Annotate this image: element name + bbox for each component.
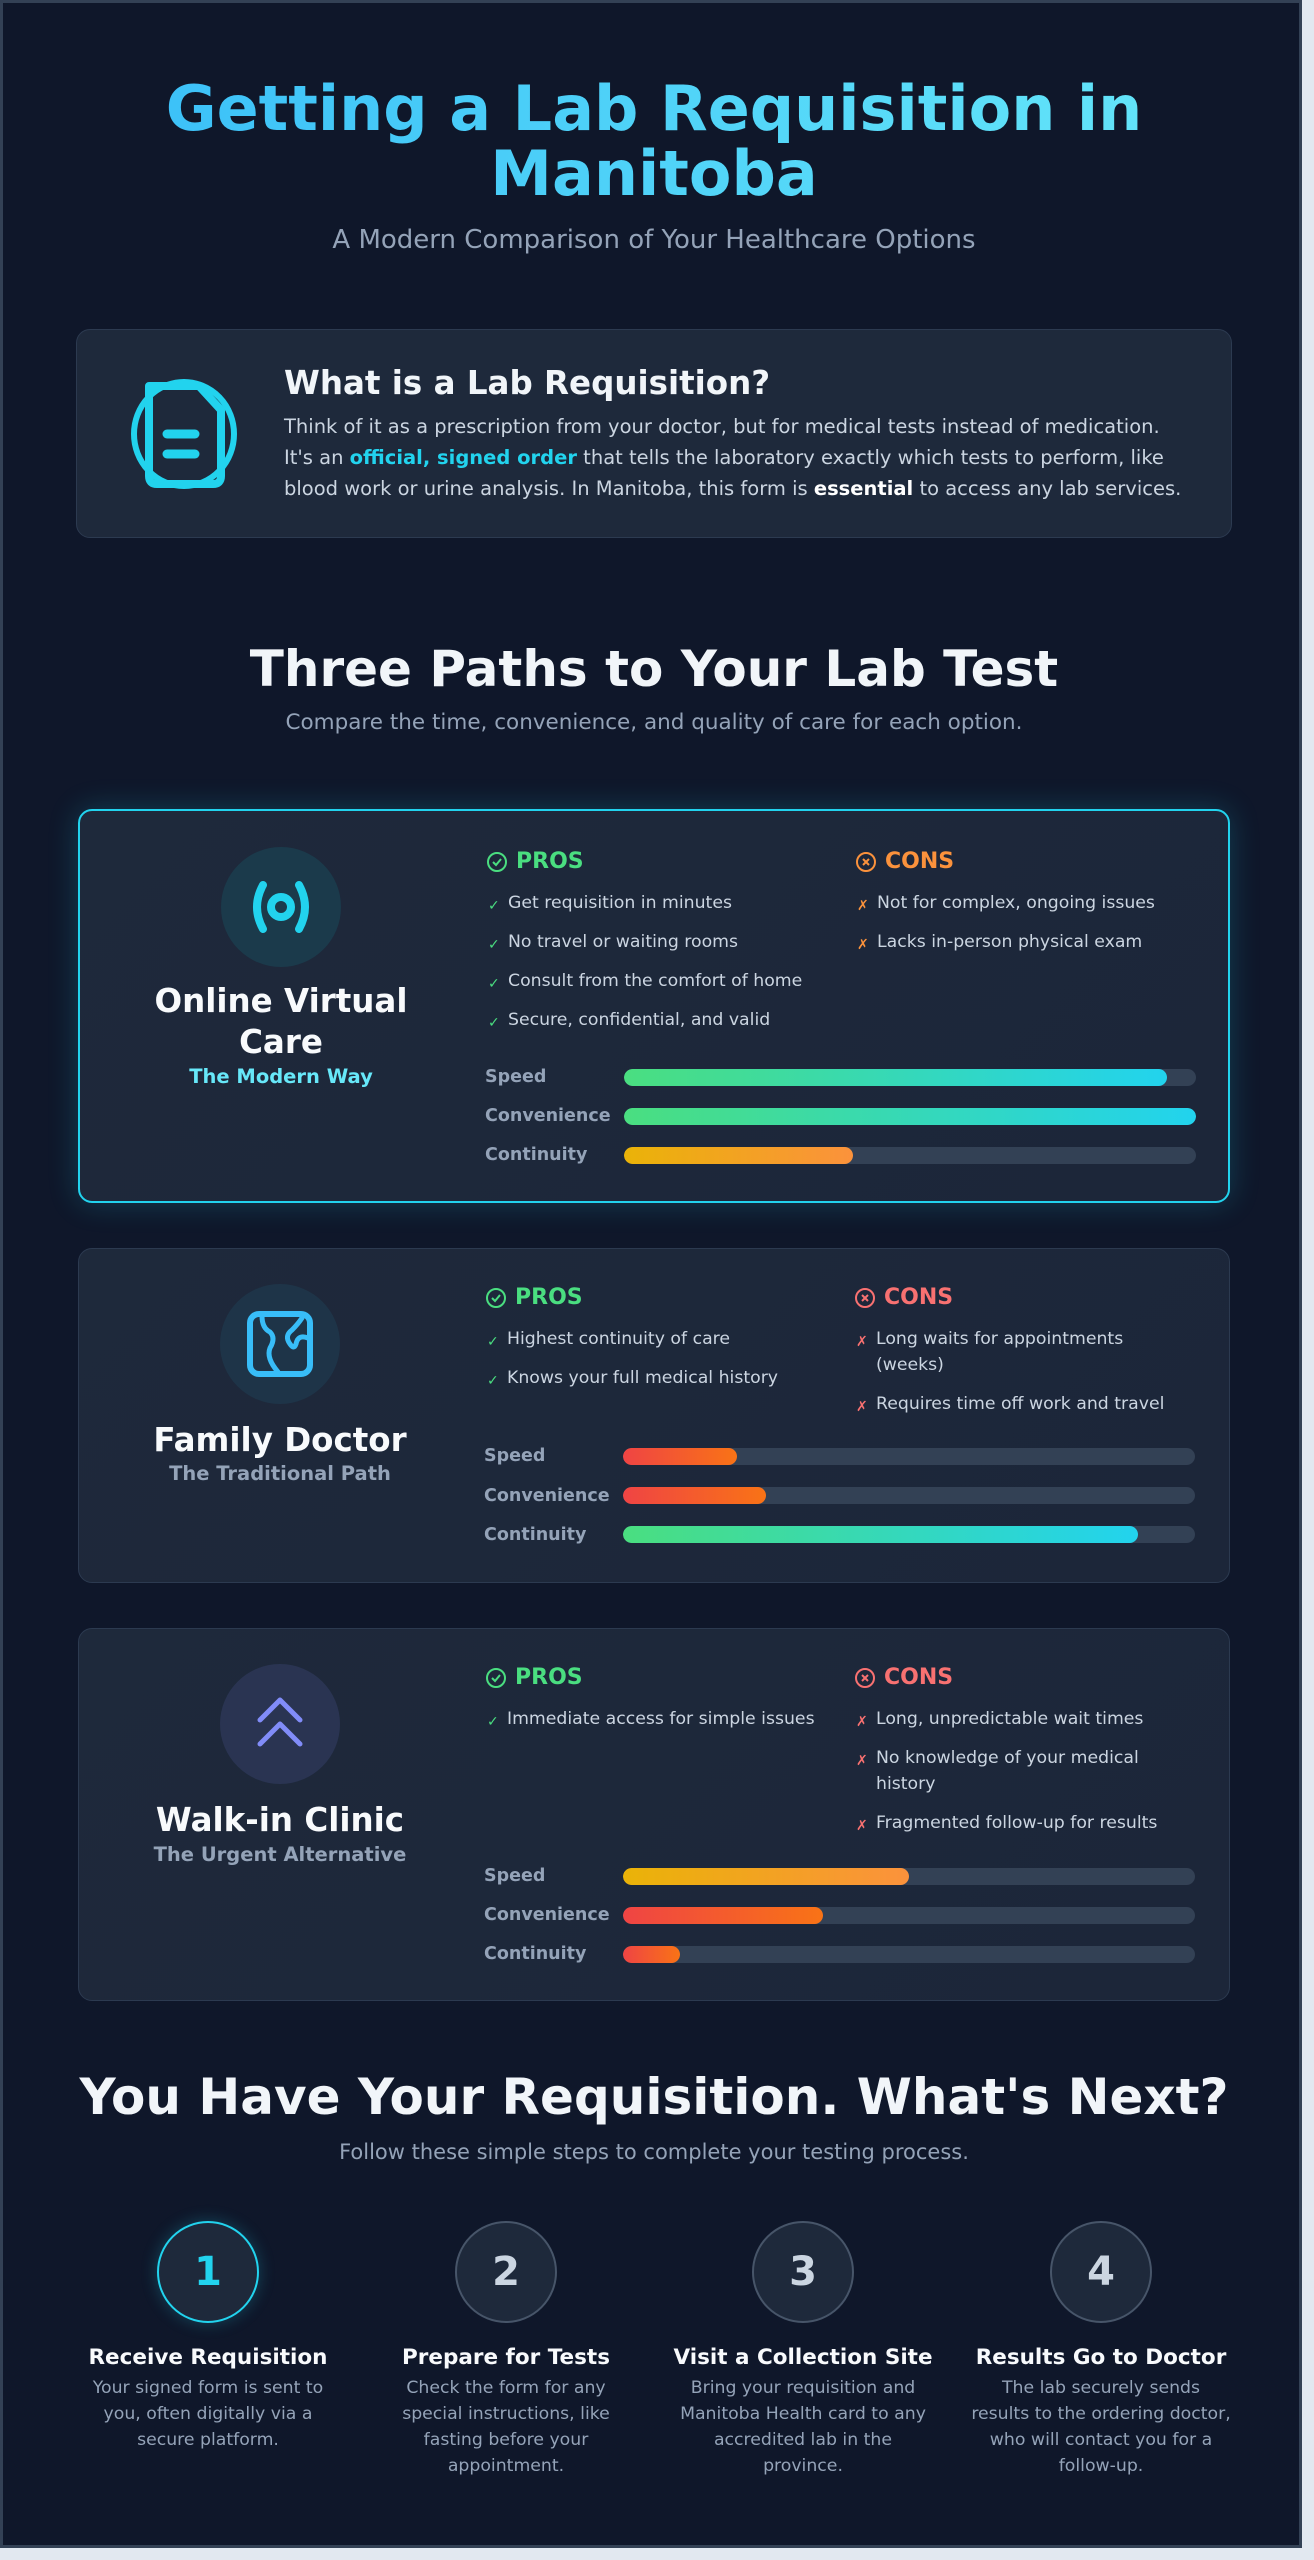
step 2 [402,2221,610,2476]
pros header: PROS [516,849,584,874]
step 2: Prepare for Tests [402,2345,610,2370]
pros header: PROS [515,1285,583,1310]
cons list: Long, unpredictable wait times [876,1709,1143,1729]
pros list [487,1329,778,1389]
step 2: special instructions, like [402,2404,610,2424]
heading: What is a Lab Requisition? [284,364,770,402]
bar chart [484,1866,1195,1964]
step 2: Check the form for any [406,2378,606,2398]
bar chart: Continuity [485,1145,587,1165]
step 2: appointment. [448,2456,564,2476]
cons header: CONS [885,849,954,874]
step 4: The lab securely sends [1002,2378,1200,2398]
cons list: ✗ [856,1818,868,1834]
cons list: No knowledge of your medical history [876,1748,1139,1794]
step 3 [673,2221,933,2476]
heading: what's next: You Have Your Requisition. What's Next? [79,2068,1229,2126]
step 3: Manitoba Health card to any [680,2404,926,2424]
icon: document [131,379,237,489]
pros header [486,1665,583,1690]
cons header: CONS [884,1665,953,1690]
step 4: who will contact you for a [990,2430,1212,2450]
cons list: ✗ [857,937,869,953]
pros list: ✓ [488,1015,500,1031]
bar chart: Convenience [485,1106,611,1126]
pros list [488,893,802,1031]
cons header: CONS [884,1285,953,1310]
pros list: Get requisition in minutes [508,893,732,913]
step 4: Results Go to Doctor [976,2345,1226,2370]
pros list: Consult from the comfort of home [508,971,802,991]
heading: three paths: Three Paths to Your Lab Test [250,640,1058,698]
subheading: Follow these simple steps to complete your testing process. [339,2140,969,2164]
bar chart: Convenience [484,1905,610,1925]
cons list: Long waits for appointments (weeks) [876,1329,1123,1375]
pros list: ✓ [488,937,500,953]
icon: chevrons [220,1664,340,1784]
pros list: ✓ [488,976,500,992]
panel: family doctor [78,1248,1230,1583]
pros list: No travel or waiting rooms [508,932,738,952]
pros list: ✓ [487,1373,499,1389]
pros list: ✓ [488,898,500,914]
card subtitle: The Urgent Alternative [154,1843,406,1866]
step 3: Visit a Collection Site [673,2345,933,2370]
card subtitle: The Traditional Path [169,1462,391,1485]
bar chart: Speed [484,1446,545,1466]
body text: It's an official, signed order that tells the laboratory exactly which tests to perform, like [284,446,1164,469]
step 1: Receive Requisition [88,2345,328,2370]
cons list: ✗ [856,1753,868,1769]
step 3: accredited lab in the [714,2430,892,2450]
card title: Walk-in Clinic [156,1801,404,1839]
step 2: 2 [492,2249,520,2295]
title [43,76,1265,206]
panel: what is a lab requisition [76,329,1232,538]
step 1 [88,2214,328,2450]
cons list: Not for complex, ongoing issues [877,893,1155,913]
step 2: fasting before your [424,2430,588,2450]
cons list [856,1709,1157,1834]
subheading: Compare the time, convenience, and quality of care for each option. [286,710,1022,735]
step 4: 4 [1087,2249,1115,2295]
title: Getting a Lab Requisition in [166,72,1142,145]
cons list: ✗ [856,1399,868,1415]
cons list: ✗ [857,898,869,914]
bar chart: Continuity [484,1525,586,1545]
cons list: Fragmented follow-up for results [876,1813,1157,1833]
pros header [486,1285,583,1310]
step 1: Your signed form is sent to [93,2378,323,2398]
body text: blood work or urine analysis. In Manitoba, this form is essential to access any lab services. [284,477,1181,500]
bar chart [484,1446,1195,1545]
pros list: Knows your full medical history [507,1368,778,1388]
card title: Online Virtual Care [154,982,408,1061]
bar chart: Speed [485,1067,546,1087]
card title: Family Doctor [153,1421,407,1459]
card subtitle: The Modern Way [189,1065,373,1088]
bar chart: Continuity [484,1944,586,1964]
pros list: ✓ [487,1714,499,1730]
step 4: follow-up. [1059,2456,1143,2476]
pros header: PROS [515,1665,583,1690]
pros list: Immediate access for simple issues [507,1709,815,1729]
cons list [856,1329,1164,1415]
cons list: Requires time off work and travel [876,1394,1164,1414]
step 3: 3 [789,2249,817,2295]
step 1: secure platform. [137,2430,279,2450]
cons list [857,893,1155,953]
icon: map [220,1284,340,1404]
bar chart: Convenience [484,1486,610,1506]
icon: broadcast [221,847,341,967]
pros list: ✓ [487,1334,499,1350]
step 1: 1 [194,2249,222,2295]
body text: Think of it as a prescription from your doctor, but for medical tests instead of medication. [284,415,1160,438]
cons list: ✗ [856,1714,868,1730]
bar chart: Speed [484,1866,545,1886]
title: Manitoba [490,137,818,210]
step 4 [971,2221,1231,2476]
subtitle: A Modern Comparison of Your Healthcare Options [332,225,976,255]
cons list: Lacks in-person physical exam [877,932,1142,952]
step 4: results to the ordering doctor, [971,2404,1231,2424]
body text [284,415,1181,500]
step 3: province. [763,2456,843,2476]
pros list: Highest continuity of care [507,1329,730,1349]
step 3: Bring your requisition and [691,2378,915,2398]
panel: online virtual care [78,809,1230,1203]
pros header [487,849,584,874]
bar chart [485,1067,1196,1165]
step 1: you, often digitally via a [104,2404,312,2424]
cons list: ✗ [856,1334,868,1350]
pros list: Secure, confidential, and valid [508,1010,770,1030]
panel: walk-in clinic [78,1628,1230,2001]
